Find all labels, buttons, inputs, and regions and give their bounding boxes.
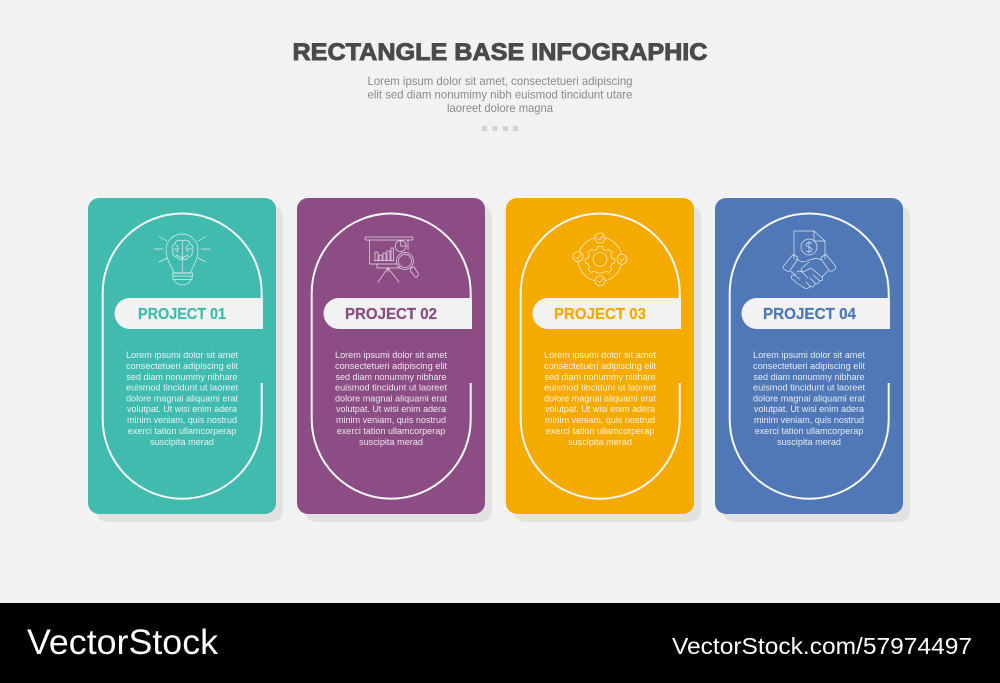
body text: suscipita merad bbox=[568, 437, 632, 447]
panel: project 02 bbox=[297, 198, 492, 522]
body text: euismod tincidunt ut laoreet bbox=[544, 383, 656, 393]
title: RECTANGLE BASE INFOGRAPHIC bbox=[292, 39, 708, 66]
panel: project 04 bbox=[715, 198, 910, 522]
icon: presentation board with magnifier bbox=[365, 237, 418, 282]
body text: suscipita merad bbox=[359, 437, 423, 447]
body text: Lorem ipsumi dolor sit amet bbox=[335, 350, 447, 360]
body text bbox=[126, 350, 238, 447]
dots divider bbox=[482, 126, 518, 131]
body text bbox=[753, 350, 865, 447]
body text: sed diam nonummy nibhare bbox=[336, 372, 446, 382]
label: project 03: PROJECT 03 bbox=[554, 306, 646, 323]
subtitle text: laoreet dolore magna bbox=[447, 101, 553, 115]
body text: Lorem ipsumi dolor sit amet bbox=[126, 350, 238, 360]
subtitle text: elit sed diam nonumimy nibh euismod tincidunt utare bbox=[368, 88, 633, 102]
body text: sed diam nonummy nibhare bbox=[754, 372, 864, 382]
footer bar bbox=[0, 603, 1000, 683]
label: project 02: PROJECT 02 bbox=[345, 306, 437, 323]
body text: sed diam nonummy nibhare bbox=[544, 372, 656, 382]
body text: minim veniam, quis nostrud bbox=[127, 415, 237, 425]
body text: euismod tincidunt ut laoreet bbox=[335, 383, 447, 393]
label: project 04: PROJECT 04 bbox=[763, 306, 856, 323]
body text: Lorem ipsumi dolor sit amet bbox=[544, 350, 656, 360]
icon: gear with orbiting check marks bbox=[573, 233, 627, 286]
body text: consectetueri adipiscing elit bbox=[335, 361, 447, 371]
body text: euismod tincidunt ut laoreet bbox=[753, 383, 865, 393]
body text: volutpat. Ut wisi enim adera bbox=[545, 404, 656, 414]
footer logo text: VectorStock bbox=[27, 623, 219, 662]
body text: sed diam nonummy nibhare bbox=[126, 372, 238, 382]
icon: document and handshake bbox=[783, 231, 836, 288]
subtitle text bbox=[368, 74, 633, 115]
panel: project 01 bbox=[88, 198, 283, 522]
body text: dolore magnai aliquami erat bbox=[753, 393, 865, 403]
icon: light bulb with brain bbox=[154, 234, 210, 285]
body text bbox=[335, 350, 447, 447]
body text: exerci tation ullamcorperap bbox=[546, 426, 654, 436]
body text: dolore magnai aliquami erat bbox=[126, 393, 238, 403]
body text: suscipita merad bbox=[777, 437, 841, 447]
body text: consectetueri adipiscing elit bbox=[126, 361, 238, 371]
body text: dolore magnai aliquami erat bbox=[335, 393, 447, 403]
body text: consectetueri adipiscing elit bbox=[753, 361, 865, 371]
body text: minim veniam, quis nostrud bbox=[336, 415, 446, 425]
label: project 01: PROJECT 01 bbox=[138, 306, 226, 323]
body text: euismod tincidunt ut laoreet bbox=[126, 383, 238, 393]
panel: project 03 bbox=[506, 198, 701, 522]
body text: suscipita merad bbox=[150, 437, 214, 447]
body text: exerci tation ullamcorperap bbox=[128, 426, 236, 436]
body text: exerci tation ullamcorperap bbox=[337, 426, 445, 436]
body text: minim veniam, quis nostrud bbox=[545, 415, 655, 425]
body text: minim veniam, quis nostrud bbox=[754, 415, 864, 425]
body text: dolore magnai aliquami erat bbox=[544, 393, 656, 403]
body text: volutpat. Ut wisi enim adera bbox=[336, 404, 447, 414]
body text: volutpat. Ut wisi enim adera bbox=[127, 404, 238, 414]
body text: volutpat. Ut wisi enim adera bbox=[754, 404, 865, 414]
footer url text: VectorStock.com/57974497 bbox=[672, 633, 972, 659]
body text: exerci tation ullamcorperap bbox=[755, 426, 863, 436]
body text bbox=[544, 350, 656, 447]
body text: consectetueri adipiscing elit bbox=[544, 361, 656, 371]
subtitle text: Lorem ipsum dolor sit amet, consectetueri adipiscing bbox=[368, 74, 632, 88]
body text: Lorem ipsumi dolor sit amet bbox=[753, 350, 865, 360]
